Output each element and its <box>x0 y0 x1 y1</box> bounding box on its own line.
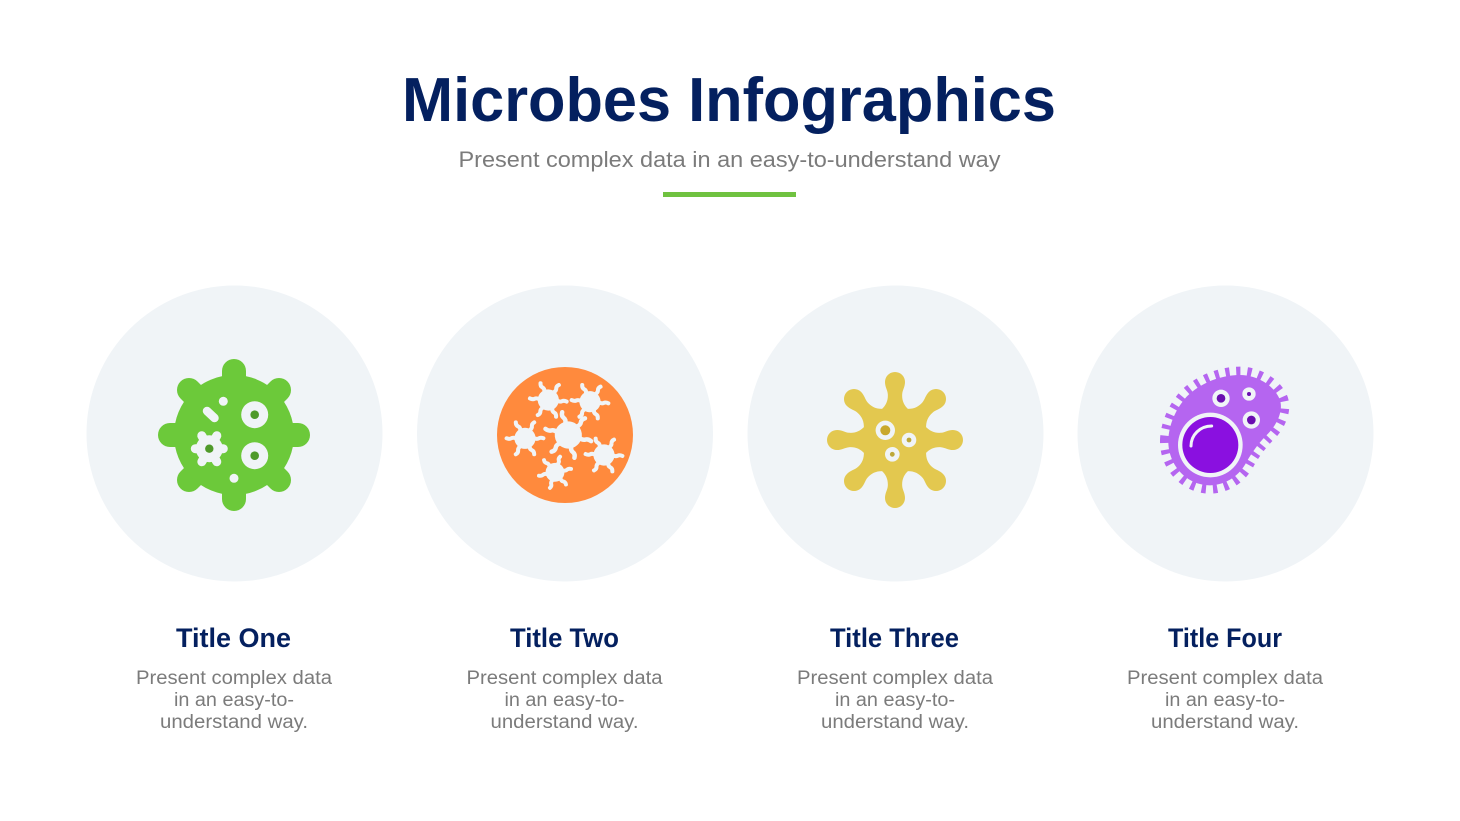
text block: description two: understand way. <box>490 712 638 733</box>
text block: description one: in an easy-to- <box>174 690 294 711</box>
icon: yellow amoeba <box>827 372 963 508</box>
text block: description four: Present complex data <box>1127 668 1323 689</box>
icon background circle three <box>748 286 1044 582</box>
text block: description one: understand way. <box>160 712 308 733</box>
heading: title two: Title Two <box>510 623 619 653</box>
text block: description one <box>136 668 332 733</box>
icon background circle four <box>1078 286 1374 582</box>
accent underline <box>663 192 796 197</box>
text block: description four <box>1127 668 1323 733</box>
icon: green microbe <box>170 371 298 499</box>
text block: description three: Present complex data <box>797 668 993 689</box>
subtitle: Present complex data in an easy-to-understand way <box>458 147 1000 172</box>
text block: description two <box>466 668 663 733</box>
heading: title four: Title Four <box>1168 623 1282 653</box>
text block: description two: in an easy-to- <box>504 690 624 711</box>
heading: title one: Title One <box>176 623 291 653</box>
text block: description one: Present complex data <box>136 668 332 689</box>
text block: description four: understand way. <box>1151 712 1299 733</box>
text block: description two: Present complex data <box>466 668 663 689</box>
panel: title two <box>417 286 713 733</box>
text block: description four: in an easy-to- <box>1165 690 1285 711</box>
icon: orange colony <box>497 367 633 503</box>
text block: description three <box>797 668 993 733</box>
panel: title one <box>86 286 382 733</box>
panel: title three <box>748 286 1044 733</box>
icon: purple bacterium <box>1168 375 1281 485</box>
text block: description three: in an easy-to- <box>835 690 955 711</box>
text block: description three: understand way. <box>821 712 969 733</box>
title: Microbes Infographics <box>402 66 1056 135</box>
icon background circle two <box>417 286 713 582</box>
panel: title four <box>1078 286 1374 733</box>
heading: title three: Title Three <box>830 623 959 653</box>
icon background circle one <box>86 286 382 582</box>
